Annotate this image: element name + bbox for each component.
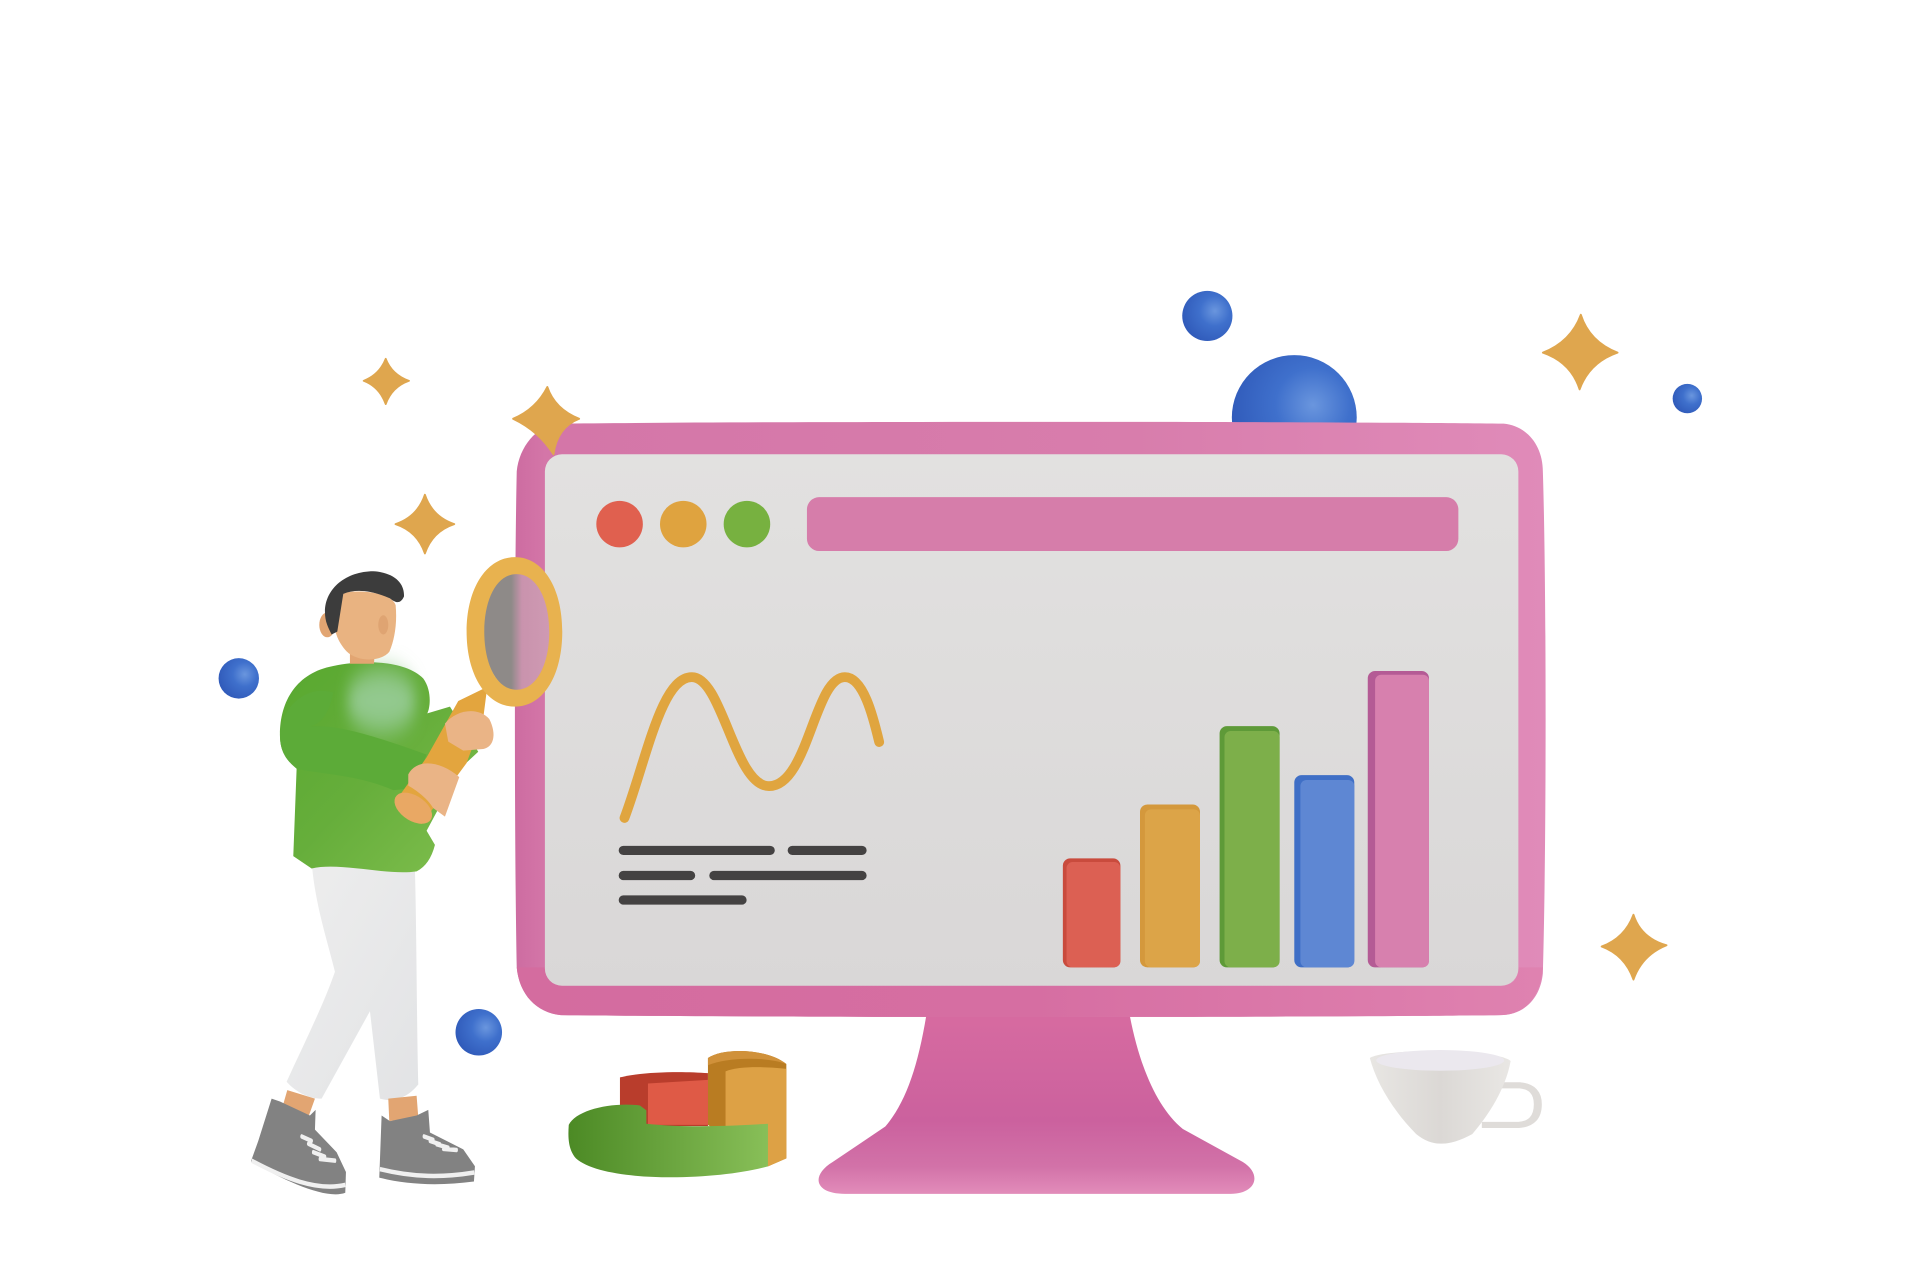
blue spheres bbox=[219, 291, 1702, 1056]
gold sparkle stars bbox=[364, 315, 1667, 980]
cup interior bbox=[1376, 1050, 1504, 1071]
sweater arm bbox=[280, 691, 427, 790]
hair bbox=[325, 571, 404, 634]
bar: red bbox=[1063, 858, 1120, 967]
bar chart bbox=[1063, 671, 1429, 967]
person with magnifying glass bbox=[251, 557, 562, 1194]
monitor frame lower shading bbox=[517, 967, 1543, 1017]
monitor screen bbox=[545, 454, 1518, 986]
bar: pink bbox=[1368, 671, 1429, 967]
face bbox=[334, 591, 396, 659]
green ring segment bbox=[568, 1105, 768, 1177]
monitor frame bbox=[515, 422, 1546, 1017]
orange cylinder segment bbox=[708, 1051, 786, 1166]
bar: green bbox=[1220, 726, 1280, 967]
magnifying glass ring bbox=[467, 557, 562, 707]
bar: orange bbox=[1140, 804, 1200, 967]
text placeholder lines bbox=[623, 850, 862, 900]
left shoe bbox=[251, 1099, 346, 1194]
red cylinder segment bbox=[620, 1072, 708, 1126]
magnifying glass handle bbox=[393, 687, 487, 830]
cup handle bbox=[1482, 1085, 1538, 1125]
trousers bbox=[287, 862, 418, 1100]
sweater highlight bbox=[347, 670, 417, 732]
upper hand bbox=[445, 711, 494, 751]
lower hand bbox=[408, 763, 459, 817]
ear bbox=[319, 612, 335, 637]
coffee cup bbox=[1370, 1050, 1538, 1144]
address bar bbox=[807, 497, 1458, 551]
monitor stand bbox=[819, 1011, 1254, 1194]
neck bbox=[350, 650, 375, 664]
nose bbox=[378, 615, 388, 634]
sweater bbox=[280, 662, 478, 872]
right shoe bbox=[379, 1110, 475, 1184]
decorative sphere: large blue behind monitor bbox=[1232, 355, 1357, 480]
ankles bbox=[282, 1090, 418, 1121]
monitor bbox=[515, 422, 1546, 1017]
3D chart objects on desk bbox=[568, 1051, 786, 1177]
bar: blue bbox=[1294, 775, 1354, 967]
line chart bbox=[624, 677, 879, 818]
cup body bbox=[1370, 1051, 1511, 1144]
window control dots bbox=[596, 501, 770, 547]
magnifying glass lens bbox=[483, 572, 550, 691]
